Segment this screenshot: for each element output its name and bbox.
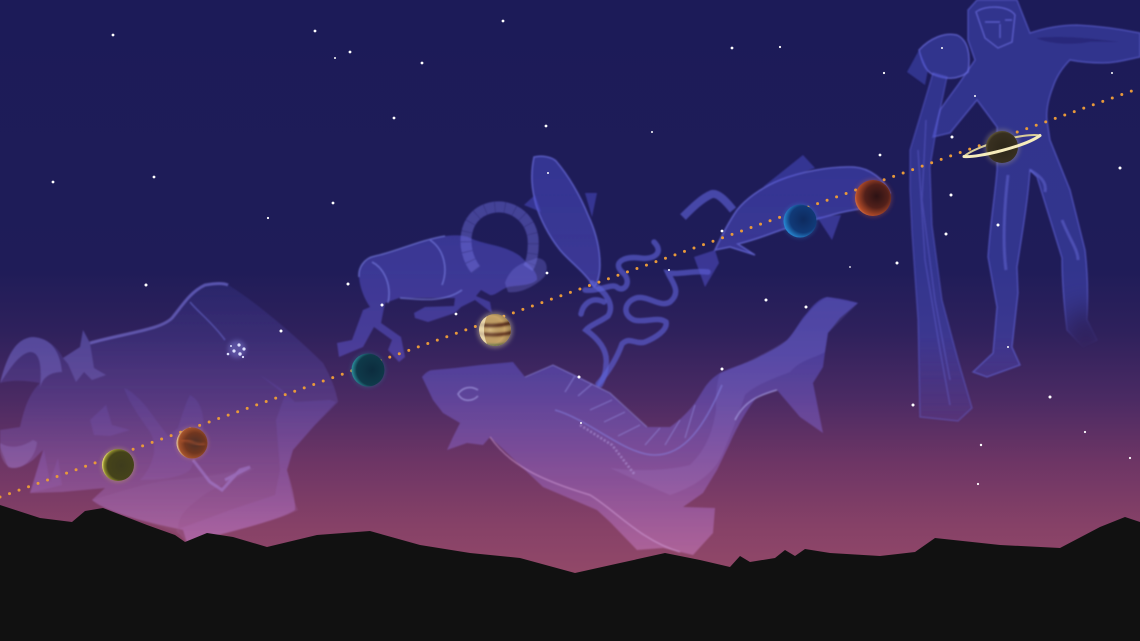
planet: Saturn with rings (964, 129, 1040, 165)
southern fish (715, 167, 890, 255)
northern fish fins (524, 193, 597, 268)
flowing water (910, 73, 972, 421)
face (976, 7, 1015, 48)
Taurus shoulder (176, 375, 336, 543)
ribbon connecting the fishes (581, 242, 708, 385)
constellation: Taurus (0, 283, 338, 543)
Taurus face (124, 388, 203, 480)
Taurus tail (0, 337, 62, 388)
planet: teal (351, 353, 385, 387)
northern fish (532, 156, 600, 287)
planet: red-brown (176, 427, 208, 459)
Taurus back ridge (90, 284, 228, 343)
stars (52, 20, 1131, 485)
Cetus lighter back band (610, 297, 858, 495)
southern fish fins and tail (694, 155, 841, 287)
constellation: Pisces (524, 155, 890, 385)
constellation: Aquarius (907, 0, 1140, 421)
mountain horizon silhouette (0, 505, 1140, 641)
Aries head (505, 258, 547, 292)
constellation: Cetus (422, 297, 858, 555)
Aries horn (466, 207, 533, 270)
Taurus horn (63, 330, 106, 382)
planet: red (854, 179, 892, 217)
planet: blue (783, 204, 817, 238)
constellation: Aries (337, 207, 547, 362)
pleiades star cluster (227, 340, 246, 358)
water bearer figure (933, 0, 1140, 377)
planet: yellow (101, 448, 135, 482)
ecliptic dotted line (0, 88, 1140, 497)
water jar (919, 34, 969, 78)
planet: Jupiter (476, 308, 514, 350)
